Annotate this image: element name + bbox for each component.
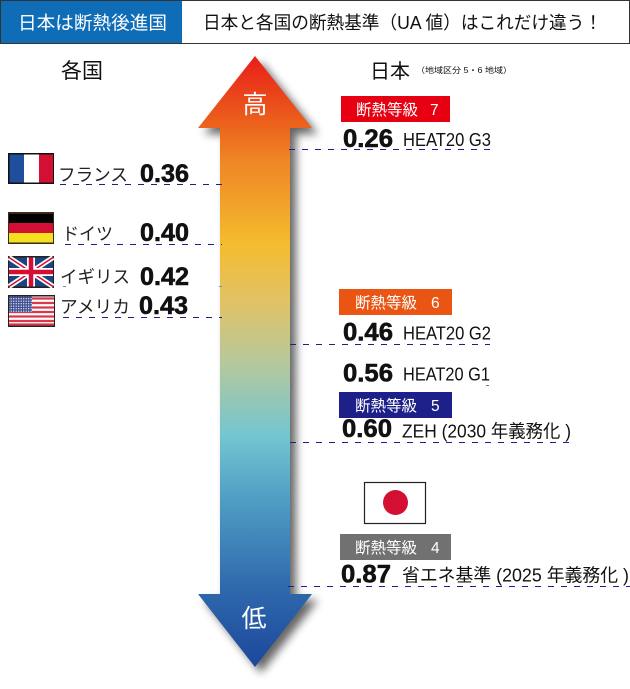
flag: USA <box>8 295 55 327</box>
badge: grade 4 <box>340 534 451 560</box>
badge: grade 7: 7 <box>430 102 439 119</box>
header label: blue tab <box>1 1 182 43</box>
value: 0.56 HEAT20 G1: HEAT20 G1 <box>403 364 490 384</box>
badge: grade 7 <box>341 96 450 122</box>
row: UK: 0.42 <box>140 263 189 291</box>
row: Germany: 0.40 <box>140 219 189 247</box>
row: UK: イギリス <box>60 267 130 287</box>
heading: countries: 各国 <box>61 60 103 83</box>
value: 0.46 HEAT20 G2: 0.46 <box>343 318 393 346</box>
value: 0.26 HEAT20 G3 <box>289 125 491 153</box>
badge: grade 7: 断熱等級 <box>356 102 418 119</box>
value: 0.56 HEAT20 G1: 0.56 <box>343 360 393 388</box>
row: Germany <box>8 212 222 247</box>
value: 0.46 HEAT20 G2: HEAT20 G2 <box>403 324 491 344</box>
value: 0.87 energy saving standard <box>288 560 630 588</box>
flag: Germany <box>8 212 54 244</box>
heading: Japan: （地域区分 5・6 地域） <box>416 65 512 75</box>
badge: grade 4: 4 <box>431 540 440 557</box>
value: 0.56 HEAT20 G1 <box>290 360 490 388</box>
row: France <box>8 153 222 188</box>
arrow label: high: 高 <box>242 91 268 119</box>
flag: UK <box>8 256 54 288</box>
badge: grade 4: 断熱等級 <box>355 540 417 557</box>
badge: grade 5: 5 <box>431 398 440 415</box>
value: 0.26 HEAT20 G3: 0.26 <box>343 125 393 153</box>
vertical gradient arrow <box>198 56 312 667</box>
header label: blue tab: 日本は断熱後進国 <box>18 12 167 34</box>
flag: France <box>8 153 54 184</box>
badge: grade 5 <box>339 392 452 418</box>
row: USA <box>8 292 222 327</box>
header title: 日本と各国の断熱基準（UA 値）はこれだけ違う！ <box>203 13 602 33</box>
header banner <box>0 0 630 44</box>
value: 0.87 energy saving standard: 省エネ基準 (2025 年義務化 ) <box>402 566 629 586</box>
value: 0.46 HEAT20 G2 <box>290 318 491 346</box>
badge: grade 6: 断熱等級 <box>355 295 417 312</box>
value: 0.60 ZEH: 0.60 <box>342 415 392 443</box>
heading: Japan <box>370 60 512 83</box>
value: 0.26 HEAT20 G3: HEAT20 G3 <box>403 130 491 150</box>
value: 0.60 ZEH: ZEH (2030 年義務化 ) <box>402 422 571 442</box>
badge: grade 6: 6 <box>431 295 440 312</box>
row: UK <box>8 256 222 291</box>
value: 0.87 energy saving standard: 0.87 <box>341 560 391 588</box>
row: France: 0.36 <box>140 160 189 188</box>
row: France: フランス <box>58 165 128 185</box>
flag: Japan <box>364 482 426 524</box>
badge: grade 6 <box>339 289 452 315</box>
row: USA: アメリカ <box>60 297 130 317</box>
heading: Japan: 日本 <box>370 60 410 83</box>
row: Germany: ドイツ <box>62 224 113 244</box>
arrow label: low: 低 <box>241 605 267 633</box>
arrow shadow <box>204 62 318 673</box>
value: 0.60 ZEH <box>290 415 571 443</box>
badge: grade 5: 断熱等級 <box>355 398 417 415</box>
row: USA: 0.43 <box>139 292 188 320</box>
